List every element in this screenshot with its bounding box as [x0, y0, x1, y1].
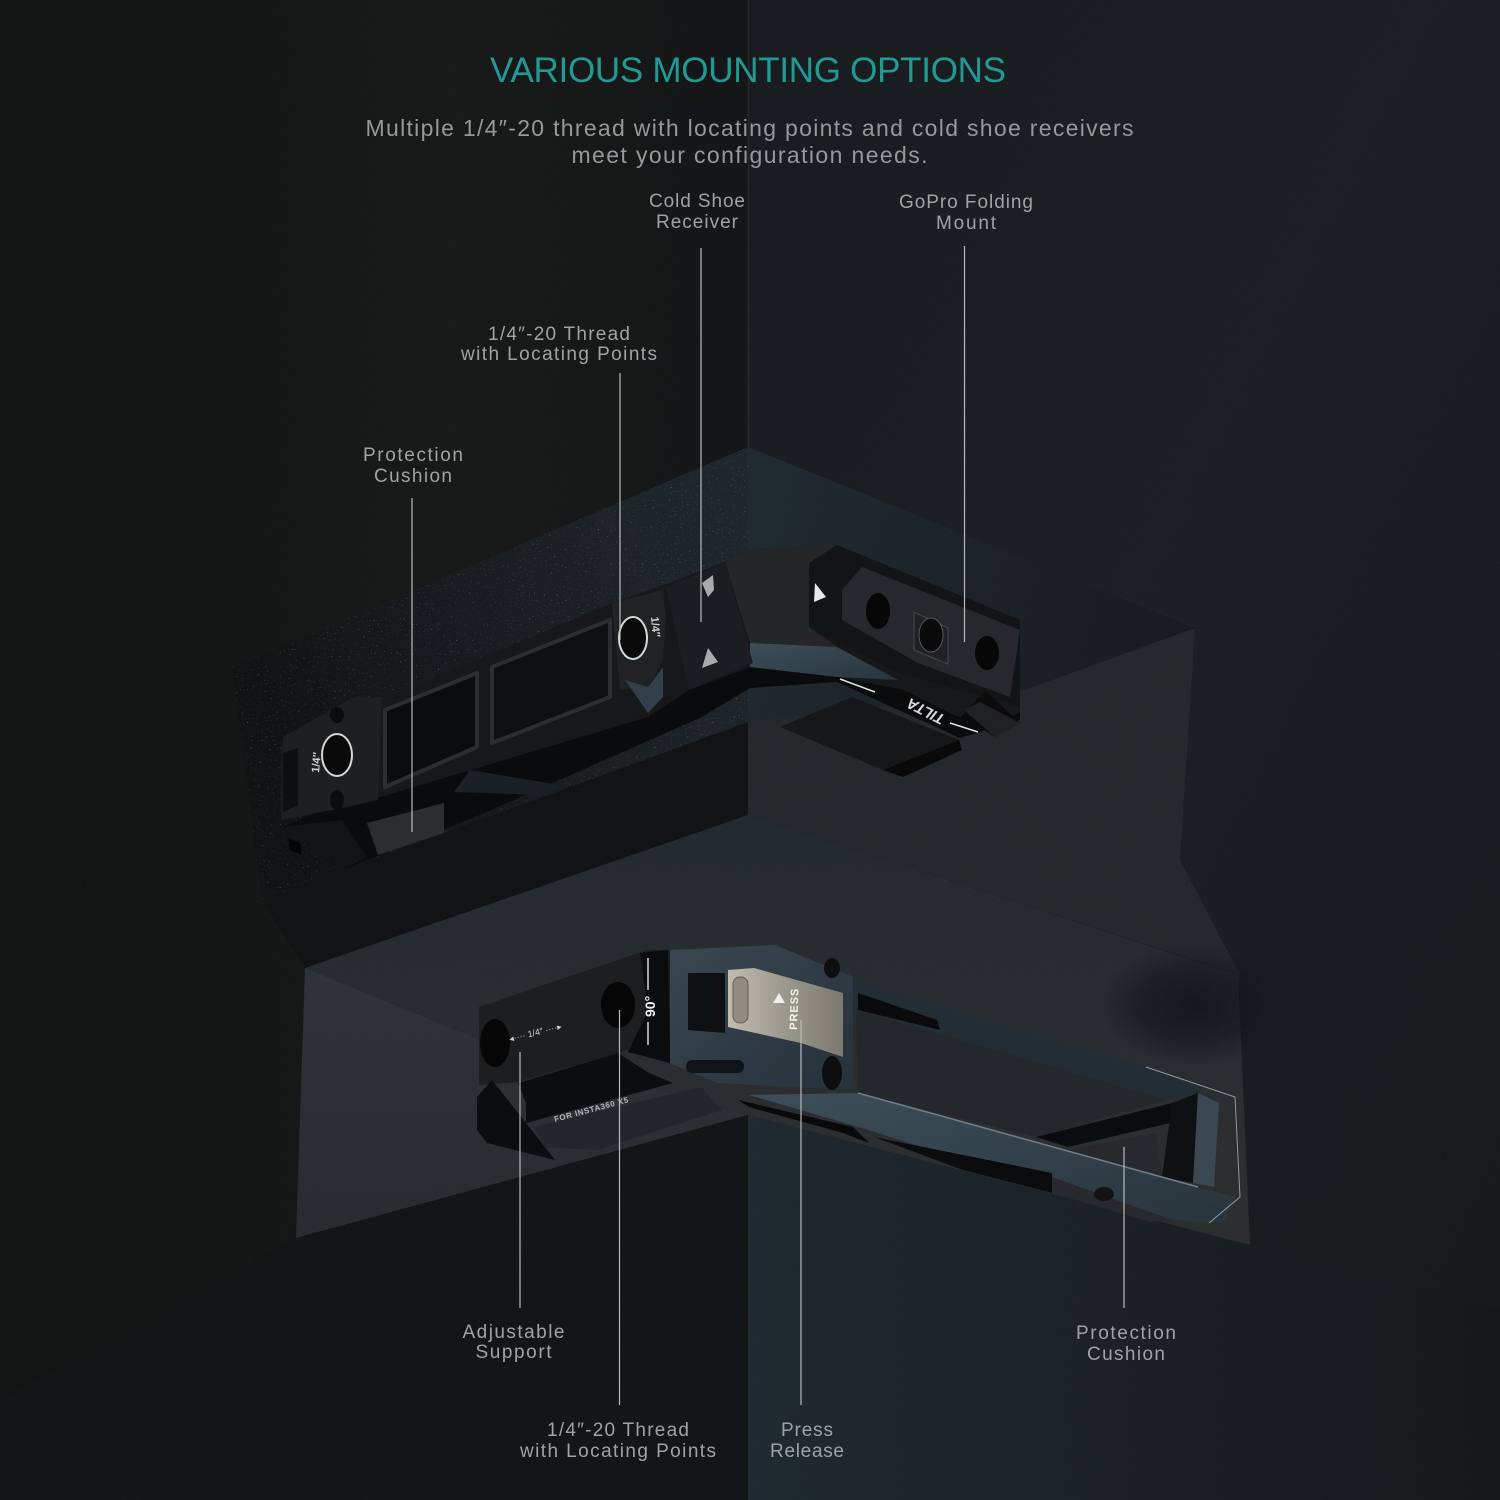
quarter inch hole one [619, 617, 647, 659]
callout: press release [770, 1020, 844, 1462]
thread block [612, 590, 666, 690]
callout: cold shoe receiver [649, 191, 745, 622]
upper rail [853, 980, 1219, 1103]
gopro center mount [914, 612, 948, 664]
callout: adjustable support: Adjustable [462, 1322, 564, 1343]
outer highlight [1146, 1067, 1240, 1223]
callout: cold shoe receiver: Cold Shoe [649, 191, 745, 212]
mount recess [809, 545, 1020, 707]
GoPro folding leaf [842, 567, 1020, 697]
teal chamfer [750, 643, 898, 680]
main plate [281, 545, 1020, 820]
callout: gopro folding mount: GoPro Folding [899, 192, 1033, 213]
callout: gopro folding mount [899, 192, 1033, 642]
callout: lower protection cushion [1076, 1147, 1176, 1365]
subtitle: meet your configuration needs. [572, 142, 928, 168]
window two [492, 620, 610, 743]
end connector [477, 1080, 555, 1160]
side cushion [1052, 1133, 1162, 1177]
edge highlight [858, 1093, 1198, 1187]
housing notch upper [824, 958, 840, 978]
callout: press release: Press [781, 1420, 833, 1441]
tilta corner chamfer [964, 702, 1020, 737]
logo dash right [950, 723, 978, 732]
callout: lower thread: 1/4″-20 Thread [547, 1420, 689, 1441]
quarter inch hole two [322, 734, 352, 776]
middle body block [725, 545, 837, 647]
callout: gopro folding mount: Mount [936, 213, 997, 234]
protection cushion [367, 803, 444, 855]
small rear foot [454, 770, 560, 795]
rear bump [1052, 1177, 1172, 1222]
black cylinder foot [874, 1137, 1052, 1193]
dark upper channel [858, 993, 940, 1030]
housing notch lower [822, 1056, 842, 1090]
title: VARIOUS MOUNTING OPTIONS [490, 51, 1006, 90]
callout: upper thread: 1/4″-20 Thread [488, 324, 630, 345]
lower latch slot [686, 1060, 744, 1073]
tilta label band [837, 677, 1020, 737]
callout: upper thread [460, 324, 657, 640]
triangle mark two [702, 648, 718, 668]
lower concrete block [0, 815, 1500, 1500]
band under plate [526, 1073, 673, 1123]
right frame band [1193, 1093, 1219, 1187]
rail window [856, 1010, 1167, 1137]
end notch bottom [330, 790, 344, 810]
device: lower cage handle [477, 945, 1240, 1223]
press release button [728, 968, 843, 1057]
cold shoe receiver plate [666, 563, 753, 690]
black arm [1036, 1103, 1183, 1147]
callout: upper protection cushion [363, 445, 463, 832]
callout: adjustable support: Support [476, 1342, 552, 1363]
triangle mark three [814, 583, 826, 602]
callout: cold shoe receiver: Receiver [656, 212, 739, 233]
logo dash left [840, 679, 875, 692]
thread hole one [480, 1019, 510, 1067]
end block side slot [283, 748, 298, 812]
underside shadow [281, 640, 1020, 870]
subtitle [366, 115, 1134, 168]
callout: lower thread: with Locating Points [519, 1441, 716, 1462]
thread hole two [601, 982, 635, 1028]
right end post [1162, 1093, 1198, 1183]
quarter inch dimension: ◂···· 1/4″ ····▸ [508, 1021, 563, 1044]
callout: upper protection cushion: Cushion [374, 466, 452, 487]
degree arrow top [647, 958, 649, 990]
end connector port [288, 838, 302, 855]
rail under slot [738, 1100, 869, 1143]
end notch top [330, 707, 344, 723]
support foot [534, 1087, 722, 1150]
gopro hole one [866, 593, 890, 629]
long rail [749, 1093, 1235, 1223]
rear hole [1094, 1187, 1114, 1201]
housing body [670, 945, 853, 1090]
degree arrow bottom [647, 1022, 649, 1045]
degree label: 90° [642, 996, 658, 1017]
window one [385, 673, 477, 787]
press label: PRESS [788, 987, 801, 1030]
callout: lower protection cushion: Cushion [1087, 1344, 1165, 1365]
callout: lower protection cushion: Protection [1076, 1323, 1176, 1344]
rotation knob [628, 950, 670, 1063]
subtitle: Multiple 1/4″-20 thread with locating points and cold shoe receivers [366, 115, 1134, 141]
top divider line [748, 0, 750, 447]
callout: upper protection cushion: Protection [363, 445, 463, 466]
wall shadow [780, 697, 959, 770]
teal clip [625, 667, 663, 713]
button slot [733, 977, 748, 1023]
quarter inch label one: 1/4″ [648, 616, 662, 638]
gopro screw [919, 618, 943, 652]
upper concrete block [232, 447, 1240, 975]
tilta logo: TILTA [904, 694, 948, 728]
callout: lower thread [519, 1010, 716, 1462]
end connector [281, 820, 367, 870]
callout: upper thread: with Locating Points [460, 344, 657, 365]
triangle marks [702, 575, 714, 597]
gopro hole two [975, 636, 999, 670]
black foot strip [883, 740, 962, 777]
front plate [479, 950, 670, 1085]
concrete speckles [232, 447, 752, 907]
quarter inch label two: 1/4″ [310, 751, 324, 773]
press triangle [773, 993, 785, 1003]
latch opening [688, 973, 725, 1033]
adjustable support arm [518, 1053, 649, 1103]
for insta label: FOR INSTA360 X5 [553, 1095, 630, 1124]
callout: adjustable support [462, 1052, 564, 1363]
end block [281, 697, 382, 820]
device: upper cage handle [281, 545, 1020, 870]
callout: press release: Release [770, 1441, 844, 1462]
